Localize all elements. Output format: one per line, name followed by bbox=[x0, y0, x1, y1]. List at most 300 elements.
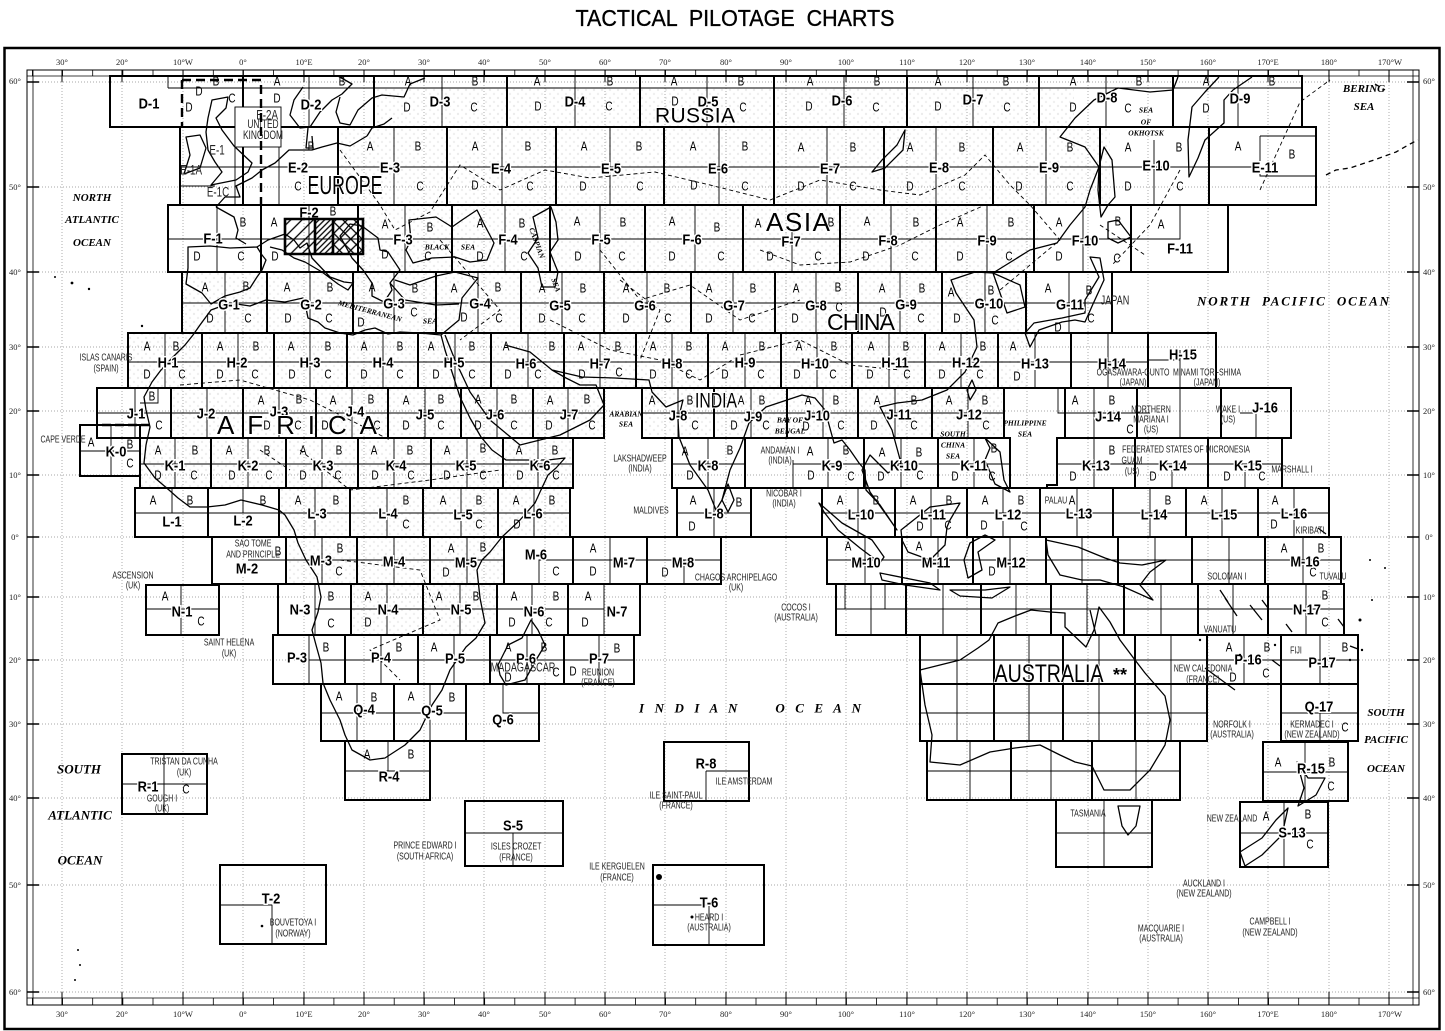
row K charts bbox=[80, 425, 1282, 488]
longitude labels top: 150° bbox=[1140, 57, 1156, 67]
chart S-13 bbox=[1240, 802, 1328, 867]
region: China: CHINA bbox=[827, 309, 896, 335]
latitude labels left: 40° bbox=[9, 267, 21, 277]
chart N-3: N-3 bbox=[290, 600, 311, 618]
chart E-3: B bbox=[415, 140, 421, 154]
chart D-6: D bbox=[805, 100, 813, 114]
Black Sea bbox=[424, 242, 475, 252]
chart E-1 bbox=[180, 107, 243, 205]
island and territory annotations: (AUSTRALIA) bbox=[1210, 728, 1254, 740]
chart K-0: K-0 bbox=[106, 442, 127, 460]
chart H-12 bbox=[925, 333, 998, 388]
chart H-9: C bbox=[757, 368, 765, 382]
chart D-3: A bbox=[405, 75, 412, 89]
island and territory annotations: (US) bbox=[1125, 465, 1139, 477]
chart G-3: G-3 bbox=[383, 294, 405, 312]
chart D-6: B bbox=[874, 75, 880, 89]
island and territory annotations: (INDIA) bbox=[772, 497, 796, 509]
chart N-1: C bbox=[197, 615, 205, 629]
chart D-3: D-3 bbox=[430, 92, 451, 110]
chart F-8 bbox=[840, 205, 936, 272]
longitude labels bottom bbox=[56, 1009, 1402, 1019]
dashed UK extent bbox=[182, 80, 261, 205]
chart H-7: C bbox=[615, 366, 623, 380]
unnamed Australia charts row P bbox=[920, 635, 1207, 684]
chart L-5 bbox=[423, 488, 498, 537]
chart H-15 bbox=[1148, 333, 1216, 388]
chart D-7 bbox=[907, 75, 1039, 127]
chart F-5: D bbox=[574, 250, 582, 264]
chart G-6: C bbox=[664, 312, 672, 326]
hatched coverage box bbox=[285, 219, 363, 254]
chart J-5: J-5 bbox=[416, 405, 435, 423]
chart M-3 bbox=[286, 537, 357, 584]
chart F-8: A bbox=[864, 215, 871, 229]
island and territory annotations: BOUVETOYA I bbox=[270, 916, 316, 928]
chart M-2: M-2 bbox=[236, 559, 258, 577]
longitude labels top: 10°W bbox=[173, 57, 193, 67]
chart E-10: E-10 bbox=[1142, 156, 1170, 174]
island and territory annotations: (FRANCE) bbox=[600, 871, 634, 883]
island and territory annotations: (UK) bbox=[126, 579, 140, 591]
chart D-3: D bbox=[403, 101, 411, 115]
chart J-3: C bbox=[294, 419, 302, 433]
latitude labels left: 60° bbox=[9, 76, 21, 86]
island and territory annotations: (NORWAY) bbox=[275, 927, 311, 939]
chart H-8: D bbox=[649, 368, 657, 382]
chart N-7: N-7 bbox=[607, 602, 628, 620]
chart L-15: L-15 bbox=[1211, 505, 1237, 523]
chart J-12: J-12 bbox=[956, 405, 982, 423]
chart D-6: C bbox=[872, 101, 880, 115]
chart R-15: C bbox=[1327, 780, 1335, 794]
chart G-6 bbox=[604, 272, 691, 333]
chart N-17: N-17 bbox=[1293, 600, 1321, 618]
chart K-15: D bbox=[1223, 470, 1231, 484]
chart J-7: C bbox=[588, 419, 596, 433]
island and territory annotations: ISLES CROZET bbox=[491, 840, 542, 852]
chart J-12: B bbox=[982, 394, 988, 408]
Bay of Bengal: BENGAL bbox=[774, 426, 806, 436]
chart G-8: A bbox=[793, 282, 800, 296]
Philippine Sea bbox=[1003, 418, 1047, 438]
longitude labels bottom: 30° bbox=[56, 1009, 68, 1019]
chart F-5: A bbox=[574, 215, 581, 229]
chart G-4: C bbox=[495, 312, 503, 326]
chart F-3 bbox=[358, 205, 452, 272]
chart D-2: D bbox=[273, 92, 281, 106]
chart J-9: J-9 bbox=[744, 407, 763, 425]
chart L-16: A bbox=[1272, 494, 1279, 508]
chart M-16 bbox=[1265, 537, 1341, 584]
South China Sea: CHINA bbox=[941, 440, 965, 450]
chart D-3: C bbox=[470, 101, 478, 115]
chart K-8: B bbox=[727, 444, 733, 458]
row H charts bbox=[128, 333, 1216, 388]
row L charts bbox=[135, 488, 1329, 537]
chart J-7: J-7 bbox=[560, 405, 579, 423]
chart K-11: D bbox=[951, 470, 959, 484]
chart H-10: C bbox=[829, 368, 837, 382]
chart N-5: A bbox=[436, 590, 443, 604]
latitude labels right: 20° bbox=[1423, 655, 1435, 665]
longitude labels bottom: 0° bbox=[239, 1009, 247, 1019]
longitude labels bottom: 70° bbox=[659, 1009, 671, 1019]
chart D-1 bbox=[110, 75, 243, 127]
chart L-12: L-12 bbox=[995, 505, 1021, 523]
chart S-13: S-13 bbox=[1278, 823, 1306, 841]
Indian Ocean: I N D I A N O C E A N bbox=[638, 700, 862, 716]
chart Q-4 bbox=[321, 684, 394, 741]
chart K-3 bbox=[286, 438, 358, 488]
longitude labels bottom: 20° bbox=[358, 1009, 370, 1019]
latitude labels left: 30° bbox=[9, 719, 21, 729]
chart P-3 bbox=[273, 635, 345, 684]
chart K-13 bbox=[1047, 438, 1135, 488]
latitude labels left: 20° bbox=[9, 655, 21, 665]
island and territory annotations: (INDIA) bbox=[768, 454, 792, 466]
chart K-2: K-2 bbox=[238, 456, 259, 474]
chart F-2 bbox=[261, 203, 358, 272]
chart G-3: C bbox=[410, 306, 418, 320]
chart G-10: C bbox=[991, 314, 999, 328]
chart E-7: D bbox=[797, 180, 805, 194]
chart F-6: A bbox=[669, 215, 676, 229]
title: TACTICAL PILOTAGE CHARTS bbox=[576, 5, 894, 31]
chart E-8: C bbox=[958, 180, 966, 194]
chart R-4: B bbox=[408, 748, 414, 762]
row M charts bbox=[212, 537, 1341, 584]
chart J-10: A bbox=[805, 394, 812, 408]
chart H-9: B bbox=[759, 340, 765, 354]
chart J-1: J-1 bbox=[127, 404, 146, 422]
chart K-8: A bbox=[682, 445, 689, 459]
island and territory annotations: (FRANCE) bbox=[1186, 673, 1220, 685]
chart E-11 bbox=[1209, 127, 1316, 205]
longitude labels top: 140° bbox=[1080, 57, 1096, 67]
chart F-8: F-8 bbox=[878, 231, 898, 249]
chart J-3 bbox=[243, 388, 316, 438]
chart D-6: D-6 bbox=[832, 91, 853, 109]
chart G-7: A bbox=[706, 282, 713, 296]
chart F-10: A bbox=[1056, 216, 1063, 230]
chart N-5: N-5 bbox=[451, 600, 472, 618]
chart M-5: D bbox=[442, 566, 450, 580]
chart R-4: A bbox=[364, 748, 371, 762]
chart G-11: C bbox=[1087, 312, 1095, 326]
chart L-2 bbox=[208, 488, 279, 537]
chart E-7: E-7 bbox=[820, 159, 840, 177]
island and territory annotations: VANUATU bbox=[1204, 623, 1236, 635]
chart L-1 bbox=[135, 488, 208, 537]
chart H-3: A bbox=[288, 340, 295, 354]
chart H-5: H-5 bbox=[444, 353, 465, 371]
chart F-6: D bbox=[668, 250, 676, 264]
chart K-10 bbox=[864, 438, 938, 488]
longitude labels bottom: 170°E bbox=[1257, 1009, 1279, 1019]
chart P-17: P-17 bbox=[1308, 653, 1336, 671]
chart N-5: B bbox=[473, 590, 479, 604]
island and territory annotations: MADAGASCAR bbox=[491, 661, 555, 675]
chart F-4 bbox=[452, 205, 550, 272]
chart H-12: C bbox=[976, 368, 984, 382]
chart E-6: E-6 bbox=[708, 159, 728, 177]
chart N-1 bbox=[146, 585, 219, 635]
chart L-5: A bbox=[440, 494, 447, 508]
chart D-4: A bbox=[534, 75, 541, 89]
chart H-4: B bbox=[397, 340, 403, 354]
chart G-3: D bbox=[357, 316, 365, 330]
chart E-8 bbox=[884, 127, 993, 205]
latitude labels right: 0° bbox=[1425, 532, 1433, 542]
chart K-14: K-14 bbox=[1159, 456, 1187, 474]
row R charts bbox=[122, 741, 1348, 814]
chart K-1 bbox=[140, 438, 211, 488]
chart Q-4: A bbox=[336, 690, 343, 704]
chart P-5: A bbox=[431, 641, 438, 655]
asterisks note: ** bbox=[1113, 665, 1127, 685]
chart F-1: F-1 bbox=[203, 229, 223, 247]
Arabian Sea: SEA bbox=[619, 420, 633, 428]
chart J-14 bbox=[1058, 388, 1137, 438]
latitude labels left: 50° bbox=[9, 182, 21, 192]
chart S-5 bbox=[465, 801, 563, 866]
chart J-4: D bbox=[321, 419, 329, 433]
chart G-9: D bbox=[879, 306, 887, 320]
chart F-5 bbox=[550, 205, 645, 272]
longitude labels bottom: 170°W bbox=[1378, 1009, 1402, 1019]
chart G-10: B bbox=[988, 284, 994, 298]
chart H-1: C bbox=[178, 368, 186, 382]
unnamed Australia charts row Q bbox=[920, 684, 1207, 741]
chart D-9 bbox=[1173, 75, 1302, 127]
chart L-11: D bbox=[916, 520, 924, 534]
chart D-4: D-4 bbox=[565, 92, 586, 110]
chart M-7: A bbox=[590, 542, 597, 556]
longitude labels bottom: 80° bbox=[720, 1009, 732, 1019]
chart E-2A United Kingdom: E-2A bbox=[256, 107, 279, 123]
chart J-12: C bbox=[982, 419, 990, 433]
chart J-5 bbox=[388, 388, 461, 438]
chart F-10 bbox=[1034, 205, 1131, 272]
chart J-11: B bbox=[911, 394, 917, 408]
chart K-2 bbox=[211, 438, 286, 488]
chart D-7: A bbox=[935, 75, 942, 89]
chart L-5: L-5 bbox=[453, 505, 473, 523]
unnamed Australia charts row R bbox=[927, 741, 1180, 800]
chart E-9: B bbox=[1067, 141, 1073, 155]
latitude labels left: 50° bbox=[9, 880, 21, 890]
island and territory annotations: AND PRINCIPLE bbox=[226, 548, 280, 560]
chart G-9: A bbox=[879, 282, 886, 296]
chart L-8: D bbox=[688, 520, 696, 534]
chart L-3: L-3 bbox=[307, 504, 327, 522]
chart H-1: H-1 bbox=[158, 353, 179, 371]
chart F-11 bbox=[1131, 205, 1228, 272]
chart N-6 bbox=[497, 584, 568, 635]
North Atlantic Ocean bbox=[64, 192, 120, 249]
chart G-10: G-10 bbox=[975, 294, 1004, 312]
chart K-8: D bbox=[686, 469, 694, 483]
chart H-1 bbox=[128, 333, 202, 388]
chart N-17: B bbox=[1322, 589, 1328, 603]
chart K-2: C bbox=[265, 469, 273, 483]
chart G-10: D bbox=[953, 312, 961, 326]
chart H-2: H-2 bbox=[227, 353, 248, 371]
chart H-14: H-14 bbox=[1098, 354, 1126, 372]
chart P-16 bbox=[1207, 635, 1281, 685]
chart J-11: A bbox=[874, 394, 881, 408]
chart T-2 bbox=[220, 865, 326, 944]
chart F-4: C bbox=[520, 250, 528, 264]
latitude labels left: 30° bbox=[9, 342, 21, 352]
chart L-12: B bbox=[1018, 494, 1024, 508]
chart J-14: C bbox=[1126, 423, 1134, 437]
chart N-17: C bbox=[1321, 616, 1329, 630]
chart K-10: D bbox=[877, 470, 885, 484]
chart J-10: D bbox=[802, 420, 810, 434]
chart J-5: D bbox=[402, 419, 410, 433]
chart L-15: A bbox=[1201, 494, 1208, 508]
longitude labels top: 0° bbox=[239, 57, 247, 67]
chart G-11: A bbox=[1045, 282, 1052, 296]
chart E-8: A bbox=[907, 141, 914, 155]
island and territory annotations: NORTHERN bbox=[1131, 403, 1171, 415]
chart J-15 bbox=[1137, 388, 1221, 438]
chart L-8: A bbox=[690, 494, 697, 508]
chart K-10: A bbox=[879, 446, 886, 460]
chart K-4 bbox=[358, 438, 431, 488]
chart L-14: L-14 bbox=[1141, 505, 1167, 523]
chart M-2: B bbox=[275, 545, 281, 559]
chart J-7: A bbox=[547, 394, 554, 408]
chart L-16 bbox=[1258, 488, 1329, 537]
chart J-9: A bbox=[738, 394, 745, 408]
chart L-6: D bbox=[513, 518, 521, 532]
chart D-7: D bbox=[934, 100, 942, 114]
South Atlantic Ocean: SOUTH bbox=[57, 762, 102, 776]
chart K-15: K-15 bbox=[1234, 456, 1262, 474]
chart L-11: L-11 bbox=[920, 505, 946, 523]
chart K-6 bbox=[503, 438, 573, 488]
chart M-8 bbox=[647, 537, 721, 584]
chart J-1: B bbox=[149, 390, 155, 404]
chart D-6: A bbox=[807, 75, 814, 89]
chart E-9: E-9 bbox=[1039, 158, 1059, 176]
chart J-9: D bbox=[730, 419, 738, 433]
chart J-11: D bbox=[870, 419, 878, 433]
chart J-16: J-16 bbox=[1252, 398, 1278, 416]
island and territory annotations: PALAU bbox=[1045, 494, 1067, 506]
chart G-8: C bbox=[835, 301, 843, 315]
chart H-13: A bbox=[1010, 340, 1017, 354]
longitude labels top: 50° bbox=[539, 57, 551, 67]
chart M-16: A bbox=[1281, 542, 1288, 556]
chart D-8: D bbox=[1069, 101, 1077, 115]
chart H-12: D bbox=[938, 368, 946, 382]
island and territory annotations: OGASAWARA-GUNTO bbox=[1097, 366, 1170, 378]
region: Europe: EUROPE bbox=[308, 170, 382, 200]
chart H-6: D bbox=[504, 368, 512, 382]
chart G-11: G-11 bbox=[1056, 295, 1084, 313]
chart E-7 bbox=[774, 127, 884, 205]
chart P-6: C bbox=[552, 666, 560, 680]
chart G-3 bbox=[353, 272, 436, 333]
chart N-4 bbox=[351, 584, 423, 635]
latitude labels right: 10° bbox=[1423, 470, 1435, 480]
Caspian Sea bbox=[527, 226, 563, 293]
chart K-4: A bbox=[371, 444, 378, 458]
chart G-8: B bbox=[835, 281, 841, 295]
row J charts bbox=[97, 388, 1291, 438]
chart F-10: D bbox=[1055, 250, 1063, 264]
row E charts bbox=[180, 80, 1316, 205]
chart K-6: D bbox=[516, 469, 524, 483]
chart M-6: C bbox=[552, 565, 560, 579]
chart M-6 bbox=[504, 537, 573, 584]
chart P-16: P-16 bbox=[1234, 650, 1262, 668]
Black Sea: SEA bbox=[461, 242, 475, 252]
chart M-12: D bbox=[988, 565, 996, 579]
chart M-16: B bbox=[1318, 542, 1324, 556]
chart J-3: A bbox=[258, 394, 265, 408]
island and territory annotations: (NEW ZEALAND) bbox=[1242, 926, 1298, 938]
chart N-1: A bbox=[162, 590, 169, 604]
chart P-16: C bbox=[1262, 667, 1270, 681]
latitude labels left: 0° bbox=[11, 532, 19, 542]
chart D-2: A bbox=[274, 75, 281, 89]
island and territory annotations: MARSHALL I bbox=[1271, 463, 1313, 475]
chart M-10: A bbox=[845, 540, 852, 554]
chart L-6: L-6 bbox=[523, 504, 543, 522]
chart K-5 bbox=[431, 438, 503, 488]
longitude labels top: 170°E bbox=[1257, 57, 1279, 67]
chart L-6: A bbox=[513, 494, 520, 508]
chart F-3: F-3 bbox=[393, 230, 413, 248]
chart F-11: F-11 bbox=[1167, 239, 1193, 257]
island and territory annotations: (INDIA) bbox=[628, 462, 652, 474]
chart K-1: A bbox=[155, 444, 162, 458]
row D charts bbox=[110, 75, 1302, 127]
chart Q-4: Q-4 bbox=[353, 700, 375, 718]
chart H-9: A bbox=[722, 340, 729, 354]
chart H-8: C bbox=[685, 368, 693, 382]
chart S-13: B bbox=[1305, 808, 1311, 822]
chart G-2: D bbox=[284, 312, 292, 326]
chart L-4 bbox=[350, 488, 423, 537]
South Atlantic Ocean: OCEAN bbox=[58, 852, 103, 868]
row S charts bbox=[465, 800, 1328, 867]
row T charts bbox=[220, 865, 764, 945]
island and territory annotations: (UK) bbox=[222, 647, 236, 659]
chart K-3: B bbox=[336, 444, 342, 458]
chart D-8: D-8 bbox=[1097, 88, 1118, 106]
chart K-9: D bbox=[807, 469, 815, 483]
chart K-9: B bbox=[843, 444, 849, 458]
chart H-11: A bbox=[868, 340, 875, 354]
chart L-10: L-10 bbox=[848, 505, 874, 523]
chart G-1: C bbox=[244, 312, 252, 326]
chart L-2: L-2 bbox=[233, 511, 253, 529]
chart J-11: J-11 bbox=[886, 405, 912, 423]
chart J-6: D bbox=[474, 419, 482, 433]
chart G-6: B bbox=[664, 282, 670, 296]
chart H-10: H-10 bbox=[801, 354, 829, 372]
chart H-6: A bbox=[503, 340, 510, 354]
chart D-7: B bbox=[1003, 75, 1009, 89]
latitude labels right: 60° bbox=[1423, 987, 1435, 997]
chart G-5 bbox=[521, 272, 604, 333]
